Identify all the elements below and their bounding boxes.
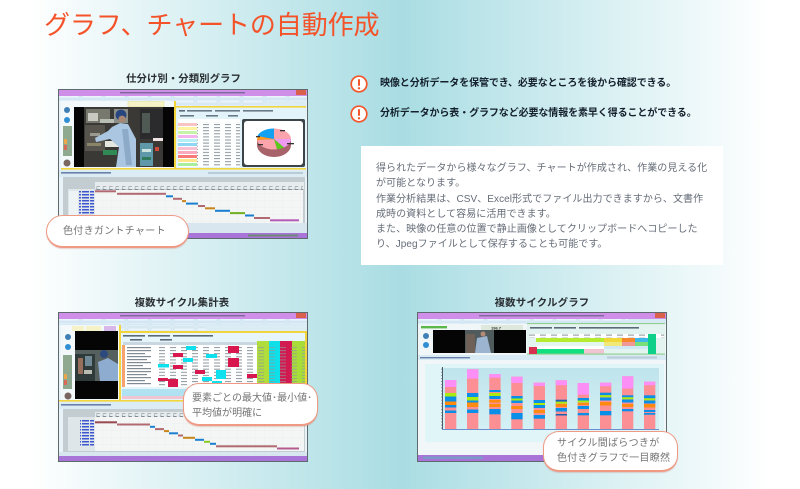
screenshot: stacked bar graph: 196.7	[491, 326, 502, 330]
panel: description: 作業分析結果は、CSV、Excel形式でファイル出力できますから、文書作	[376, 194, 703, 205]
video frame: worker at machine	[75, 331, 118, 399]
panel: description: 成時の資料として容易に活用できます。	[376, 209, 556, 220]
panel: description: り、Jpegファイルとして保存することも可能です。	[376, 239, 607, 250]
heading: sort and category graph: 仕分け別・分類別グラフ	[126, 74, 241, 85]
video frame: worker	[433, 330, 526, 353]
heading: multi-cycle summary table: 複数サイクル集計表	[135, 298, 229, 309]
panel: sort and category graph	[46, 73, 308, 250]
screenshot: stacked bar graph	[417, 312, 667, 462]
data table	[122, 341, 305, 389]
panel: description: が可能となります。	[376, 178, 465, 189]
category table	[178, 119, 240, 167]
screenshot: pie chart and gantt	[58, 89, 308, 239]
point 2 text: 分析データから表・グラフなど必要な情報を素早く得ることができる。	[380, 108, 697, 119]
callout: variation between cycles	[543, 431, 678, 472]
point 1 text: 映像と分析データを保管でき、必要なところを後から確認できる。	[380, 78, 676, 89]
callout text: 色付きガントチャート	[63, 226, 166, 237]
callout text: 色付きグラフで一目瞭然	[557, 452, 670, 464]
callout text: 要素ごとの最大値･最小値･	[192, 393, 312, 404]
heading: multi-cycle graph: 複数サイクルグラフ	[495, 298, 589, 309]
panel: description: 得られたデータから様々なグラフ、チャートが作成され、作業の見える化	[376, 163, 707, 174]
screenshot: summary table and gantt	[58, 312, 308, 462]
callout: max, min and average values	[183, 383, 318, 426]
callout text	[557, 437, 670, 464]
callout text	[192, 392, 312, 419]
panel: multi-cycle summary table	[58, 297, 318, 462]
icon: alert 1	[350, 75, 368, 93]
video frame: worker at machine	[74, 107, 174, 167]
title: グラフ、チャートの自動作成	[44, 10, 379, 40]
callout text: 平均値が明確に	[192, 408, 262, 419]
panel: description	[361, 146, 723, 265]
pie chart	[256, 128, 294, 157]
stacked bars	[445, 369, 655, 429]
panel: description: また、映像の任意の位置で静止画像としてクリップボードへコピーした	[376, 224, 698, 235]
icon: alert 2	[350, 105, 368, 123]
panel: multi-cycle graph	[417, 297, 678, 474]
callout text: サイクル間ばらつきが	[557, 438, 660, 449]
callout: colored gantt chart	[46, 215, 189, 248]
status table	[529, 334, 664, 354]
